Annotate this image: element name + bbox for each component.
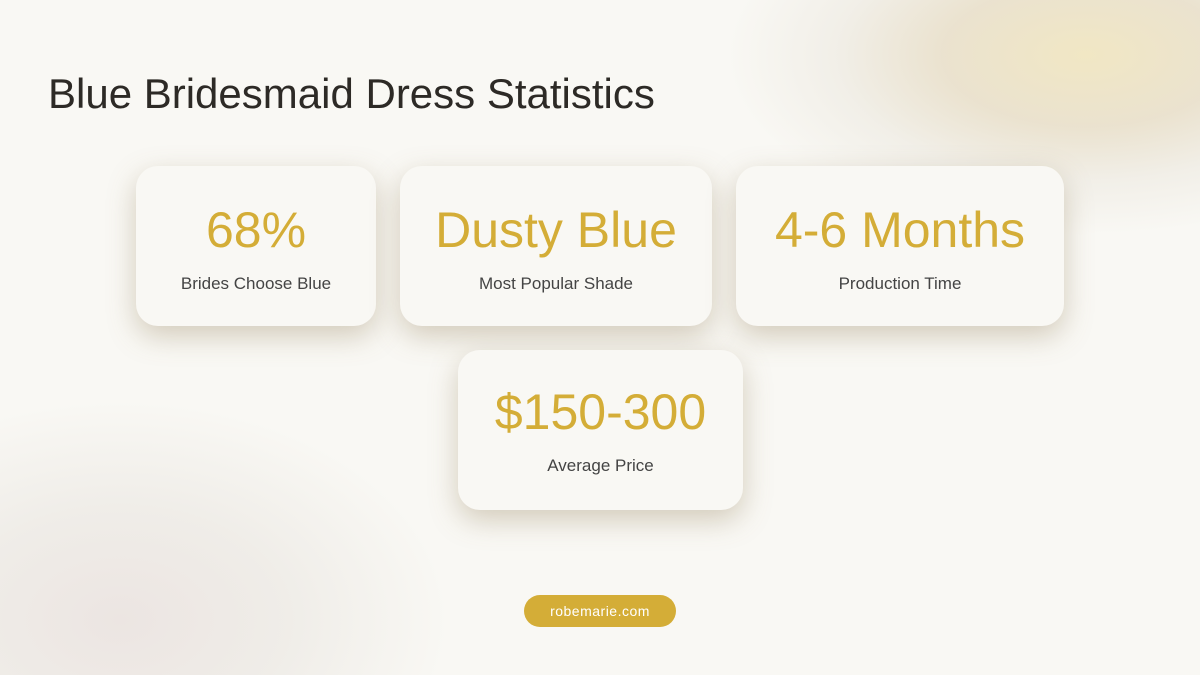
footer badge — [524, 595, 676, 627]
card: most popular shade: Most Popular Shade — [479, 274, 633, 293]
title: Blue Bridesmaid Dress Statistics — [48, 70, 655, 117]
card: production time: 4-6 Months — [775, 202, 1025, 258]
card: brides choose blue: Brides Choose Blue — [181, 274, 331, 293]
card: average price: $150-300 — [495, 384, 706, 440]
card: most popular shade: Dusty Blue — [435, 202, 677, 258]
card: most popular shade — [400, 166, 712, 326]
card: brides choose blue — [136, 166, 376, 326]
footer badge: robemarie.com — [550, 603, 650, 619]
card: average price — [458, 350, 743, 510]
card: production time — [736, 166, 1064, 326]
card: average price: Average Price — [547, 456, 654, 475]
card: production time: Production Time — [839, 274, 961, 293]
card: brides choose blue: 68% — [206, 202, 306, 258]
